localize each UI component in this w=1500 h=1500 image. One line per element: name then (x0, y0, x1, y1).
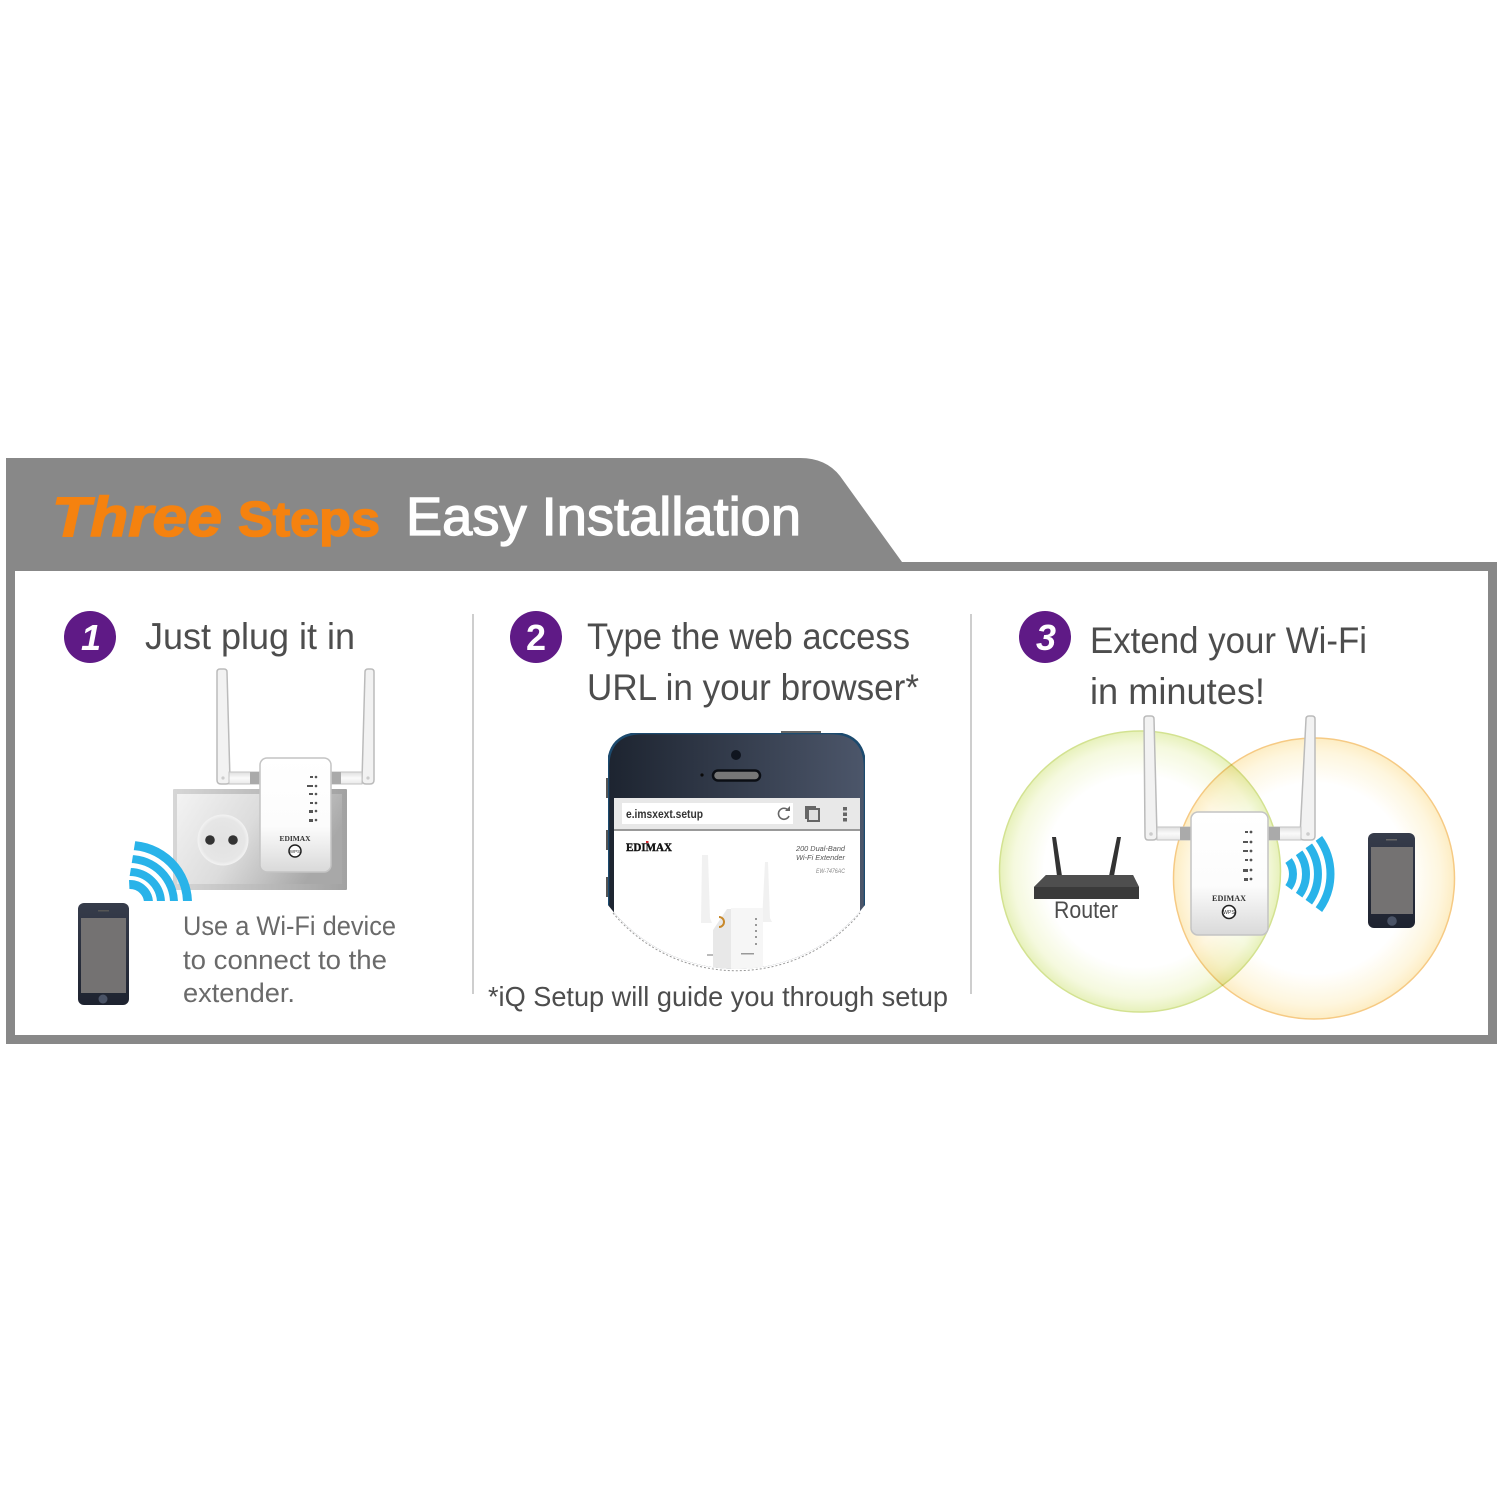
step 1 caption: to connect to the (183, 945, 387, 975)
icon: extender device large (1144, 716, 1315, 935)
panel: step 1 (64, 611, 396, 1008)
icon: wifi signal right (1289, 838, 1330, 910)
reload icon (778, 806, 790, 819)
step 1 heading: Just plug it in (145, 616, 355, 657)
step 2 heading (587, 616, 919, 708)
product photo (701, 855, 772, 972)
url text: e.imsxext.setup (626, 809, 703, 821)
title: Three Steps: Steps (238, 493, 380, 547)
icon: wifi signal (129, 841, 192, 901)
edimax logo: EDIMAX (626, 840, 672, 854)
step 3 badge (1019, 611, 1071, 663)
icon: router (1034, 837, 1139, 899)
product name: EW-7476AC (816, 869, 846, 875)
icon: phone (78, 903, 129, 1005)
step 1 caption: Use a Wi-Fi device (183, 911, 396, 941)
icon: extender device large: WPS (1223, 910, 1235, 916)
icon: extender device large: EDIMAX (1212, 894, 1246, 903)
panel: step 3 (1000, 611, 1454, 1019)
icon: extender device (217, 669, 374, 872)
step 1 caption: extender. (183, 978, 295, 1008)
panel: frame and title banner (6, 458, 1497, 1044)
step 1 badge: 1 (81, 617, 101, 658)
icon: extender device: EDIMAX (280, 834, 311, 843)
step 3 heading (1090, 620, 1367, 712)
title (52, 485, 801, 548)
step 2 badge (510, 611, 562, 663)
step 3 heading: in minutes! (1090, 671, 1265, 712)
coverage circles (1000, 731, 1454, 1019)
menu icon (843, 807, 847, 822)
step 2 heading: Type the web access (587, 616, 910, 657)
panel: step 2 (488, 611, 948, 1012)
router label: Router (1054, 897, 1118, 924)
dividers (473, 614, 971, 994)
icon: extender device: WPS (290, 849, 300, 854)
smartphone with browser (606, 731, 865, 972)
product name: Wi-Fi Extender (796, 853, 845, 862)
step 1 caption (183, 911, 396, 1008)
footnote: *iQ Setup will guide you through setup (488, 981, 948, 1012)
icon: phone right (1368, 833, 1415, 928)
tabs icon (806, 807, 819, 821)
product name: 200 Dual-Band (795, 844, 846, 853)
step 2 badge: 2 (526, 617, 546, 658)
step 2 heading: URL in your browser* (587, 667, 919, 708)
step 3 heading: Extend your Wi-Fi (1090, 620, 1367, 661)
title: Easy Installation: Easy Installation (406, 487, 801, 547)
step 1 badge (64, 611, 116, 663)
title: Three Steps: Three (52, 485, 222, 548)
step 3 badge: 3 (1036, 617, 1056, 658)
title: Three Steps (52, 485, 380, 548)
product name (795, 844, 846, 875)
icon: wall socket (173, 789, 347, 890)
